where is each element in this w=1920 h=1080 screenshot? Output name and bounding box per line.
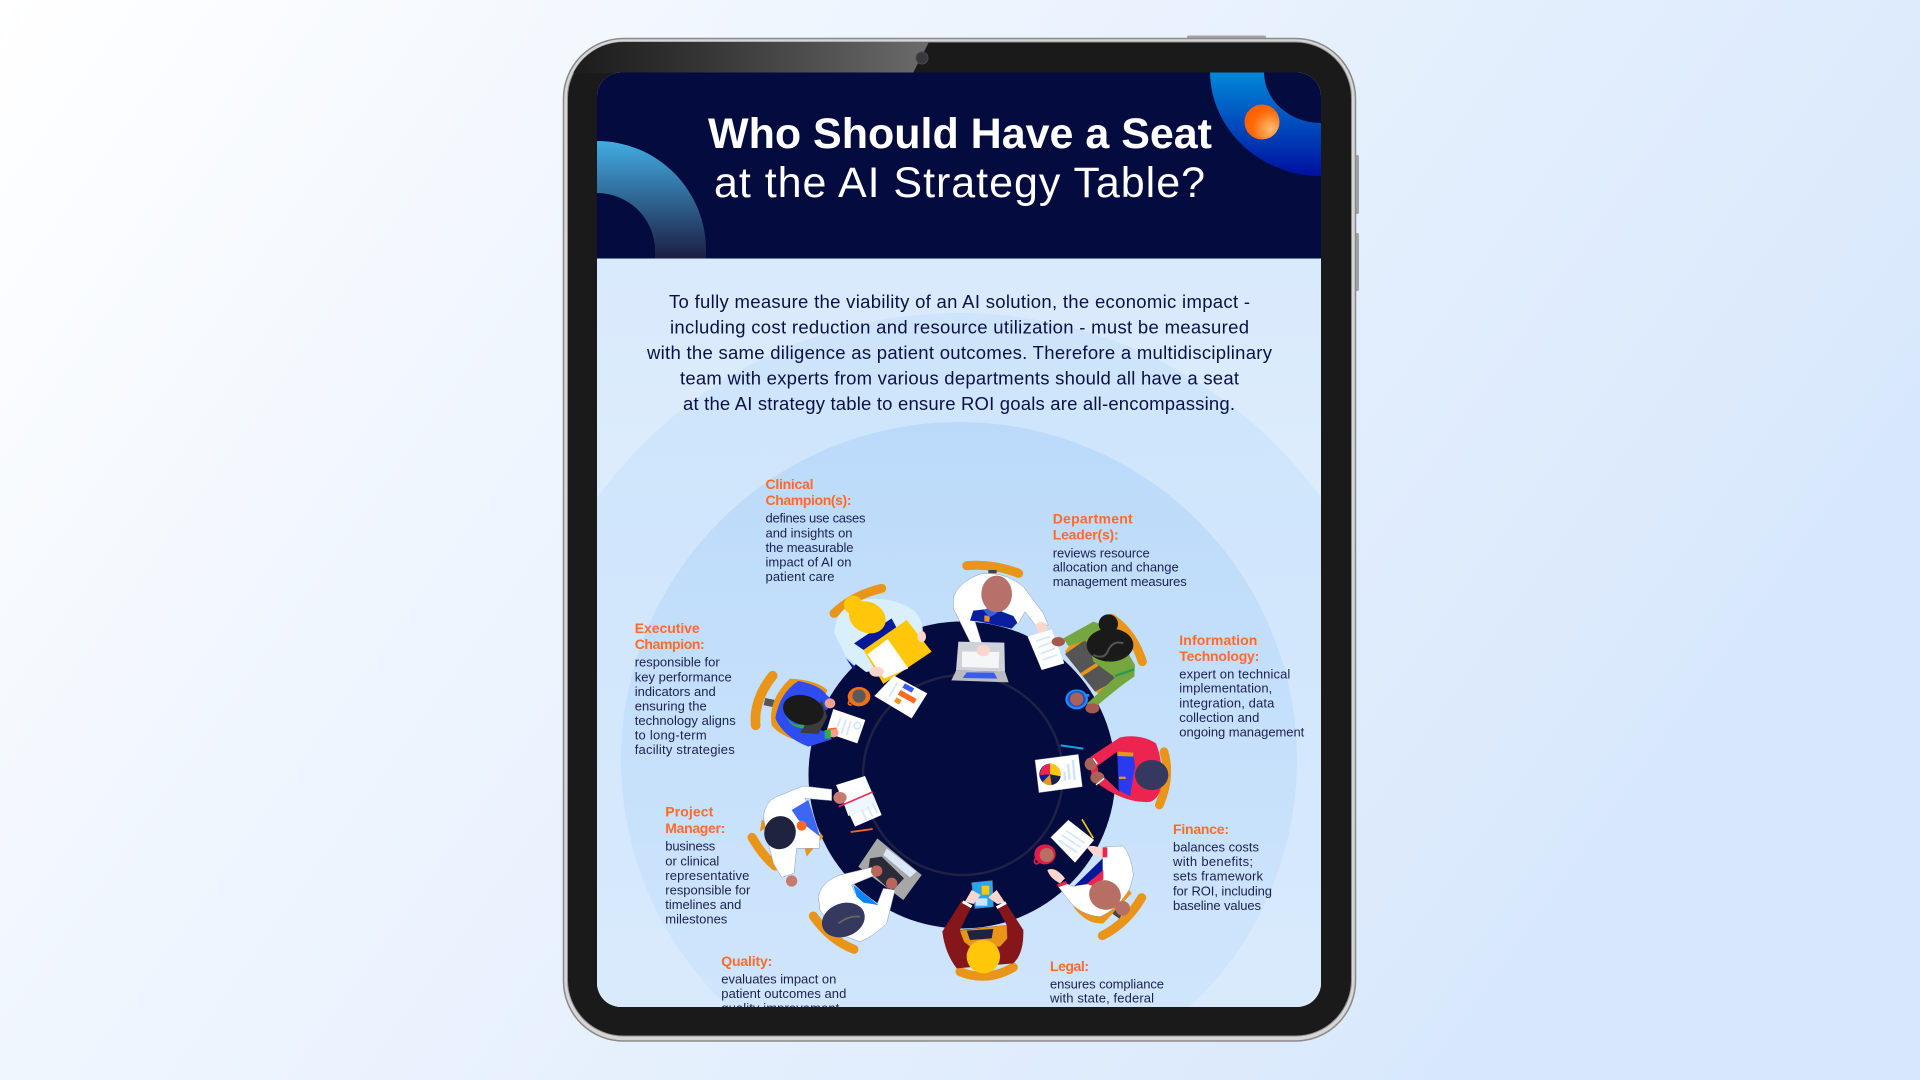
label: finance: Finance: <box>1173 821 1229 837</box>
label: legal: Legal: <box>1050 958 1089 974</box>
label: executive champion: technology aligns <box>635 713 736 728</box>
label: clinical champion: impact of AI on <box>766 555 852 570</box>
label: executive champion: to long-term <box>635 727 707 742</box>
mug: blue <box>1065 689 1089 709</box>
mug: orange <box>848 687 870 706</box>
label: information technology: ongoing management <box>1179 725 1305 740</box>
label: executive champion: responsible for <box>635 655 720 670</box>
mug: red <box>1034 844 1056 864</box>
label: finance: baseline values <box>1173 898 1262 913</box>
label: quality: patient outcomes and <box>721 986 846 1001</box>
tablet device <box>564 36 1359 1041</box>
label: department leader: Leader(s): <box>1053 526 1119 542</box>
label: finance: sets framework <box>1173 869 1264 884</box>
decorative arc: left <box>597 141 706 258</box>
person: legal white coat <box>1047 846 1142 936</box>
person: executive champion <box>755 676 865 747</box>
label: project manager: responsible for <box>665 882 751 897</box>
person: project manager <box>752 786 846 887</box>
lower table scene <box>752 776 1142 976</box>
label: information technology: implementation, <box>1179 681 1272 696</box>
title <box>708 110 1212 207</box>
intro paragraph: To fully measure the viability of an AI solution, the economic impact - <box>669 291 1250 312</box>
label: project manager: business <box>665 839 716 854</box>
orange dot <box>1244 104 1280 140</box>
laptop <box>951 642 1009 682</box>
person: department leader <box>953 565 1048 656</box>
label: executive champion: indicators and <box>635 684 716 699</box>
label: department leader: Department <box>1053 510 1133 526</box>
label: department leader: management measures <box>1053 574 1187 589</box>
label: executive champion: Champion: <box>635 636 705 652</box>
label: finance <box>1172 821 1272 913</box>
label: project manager: Manager: <box>665 820 725 836</box>
label: project manager: or clinical <box>665 853 719 868</box>
title: at the AI Strategy Table? <box>714 159 1205 207</box>
tablet in hands <box>963 881 1006 908</box>
label: information technology: collection and <box>1179 710 1259 725</box>
label: quality <box>722 956 846 1007</box>
label: legal <box>1049 958 1164 1006</box>
label: finance: for ROI, including <box>1173 883 1272 898</box>
label: executive champion: ensuring the <box>635 699 707 714</box>
tablet bezel <box>568 42 1352 1036</box>
decorative arc: right <box>1210 72 1321 176</box>
title: Who Should Have a Seat <box>708 110 1212 158</box>
label: information technology: integration, data <box>1179 695 1275 710</box>
upper table scene <box>755 565 1168 805</box>
label: project manager: timelines and <box>665 897 741 912</box>
header band <box>597 72 1321 258</box>
label: department leader: reviews resource <box>1053 545 1150 560</box>
label: project manager <box>665 804 751 927</box>
label: quality: evaluates impact on <box>721 971 836 986</box>
label: project manager: representative <box>665 868 749 883</box>
label: department leader <box>1053 510 1187 589</box>
chart sheet with bars <box>874 676 927 718</box>
document and pencil <box>1051 819 1094 863</box>
label: clinical champion: defines use cases <box>766 510 866 526</box>
label: executive champion <box>635 620 736 757</box>
label: project manager: milestones <box>665 912 728 927</box>
label: clinical champion <box>766 476 866 584</box>
side and top buttons <box>1187 36 1359 291</box>
tablet frame <box>564 38 1356 1041</box>
label: legal: with state, federal <box>1049 991 1154 1006</box>
label: clinical champion: patient care <box>766 569 834 584</box>
label: clinical champion: Champion(s): <box>766 492 852 508</box>
label: executive champion: key performance <box>635 669 732 684</box>
intro paragraph <box>646 291 1273 414</box>
person: clinical champion <box>834 588 932 684</box>
label: quality: Quality: <box>721 953 772 969</box>
person: legal dark red <box>942 901 1023 976</box>
label: executive champion: facility strategies <box>635 742 735 757</box>
round table <box>808 622 1116 928</box>
person: finance <box>1085 736 1168 805</box>
label: clinical champion: the measurable <box>766 540 854 555</box>
label: project manager: Project <box>665 804 714 820</box>
intro paragraph: including cost reduction and resource utilization - must be measured <box>670 316 1249 338</box>
label: finance: with benefits; <box>1172 854 1253 869</box>
label: information technology: Technology: <box>1179 648 1259 664</box>
label: finance: balances costs <box>1173 840 1260 855</box>
label: information technology <box>1179 632 1305 740</box>
person: information technology <box>1052 614 1142 713</box>
label: department leader: allocation and change <box>1053 560 1179 575</box>
intro paragraph: team with experts from various departments should all have a seat <box>680 368 1239 388</box>
tablet screen <box>597 72 1321 1007</box>
label: executive champion: Executive <box>635 620 700 636</box>
label: legal: ensures compliance <box>1050 976 1164 991</box>
chart sheet with pie <box>1035 745 1083 793</box>
document <box>1028 629 1064 670</box>
label: information technology: Information <box>1179 632 1257 648</box>
person: quality <box>813 838 922 949</box>
notebook <box>833 776 882 832</box>
label: clinical champion: Clinical <box>766 476 814 492</box>
camera <box>916 52 928 64</box>
label: quality: quality improvement <box>721 1000 840 1015</box>
intro paragraph: at the AI strategy table to ensure ROI goals are all-encompassing. <box>683 393 1235 414</box>
label: clinical champion: and insights on <box>766 525 852 540</box>
intro paragraph: with the same diligence as patient outcomes. Therefore a multidisciplinary <box>646 342 1273 363</box>
background circles <box>597 313 1321 1007</box>
bezel reflection <box>567 42 929 73</box>
label: information technology: expert on technical <box>1179 666 1290 681</box>
